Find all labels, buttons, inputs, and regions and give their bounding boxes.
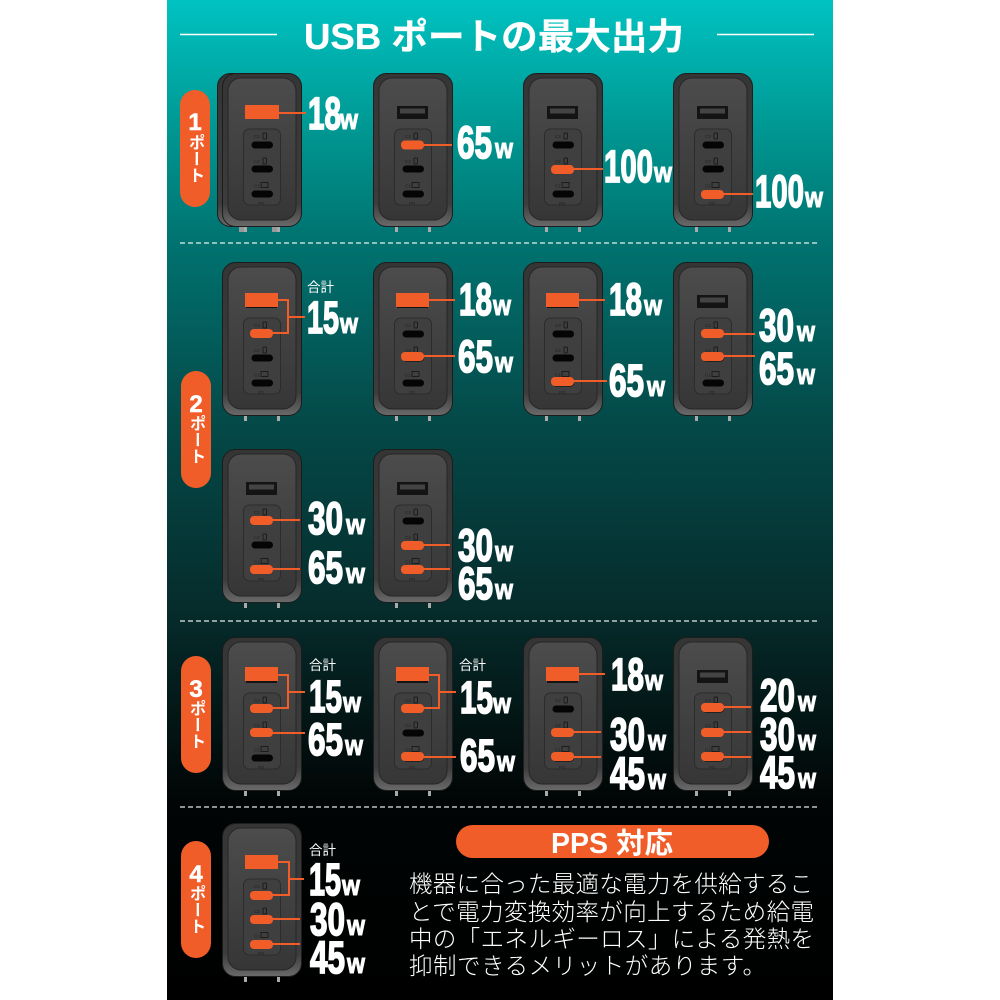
wattage total 15w 65w: 15 <box>309 671 342 722</box>
highlights and lines <box>546 293 607 386</box>
wattage 30w 65w: w <box>494 536 513 568</box>
wattage 18w 65w: 65 <box>458 331 493 382</box>
wattage 30w 65w: w <box>494 574 513 606</box>
charger: 3 ports 18w 30w 45w <box>524 638 666 799</box>
badge: 4 ports <box>181 841 211 958</box>
title: USB ポートの最大出力 <box>304 16 684 57</box>
wattage 18w: 18 <box>308 88 341 139</box>
wattage 18w 65w <box>458 274 513 382</box>
badge: 3 ports: 3 <box>189 676 203 703</box>
charger icon <box>218 74 302 232</box>
charger: 3 ports 20w 30w 45w <box>674 638 816 798</box>
text block: PPS description: 抑制できるメリットがあります。 <box>409 953 766 979</box>
wattage 18w 30w 45w: w <box>647 725 666 757</box>
wattage 20w 30w 45w <box>760 670 816 798</box>
wattage total 15w 30w 45w: 合計 <box>309 843 336 858</box>
wattage total 15w 65w: w <box>344 730 363 762</box>
wattage 30w 65w: 65 <box>458 558 493 609</box>
highlight and line <box>701 190 753 199</box>
wattage 100w: w <box>804 182 823 214</box>
wattage 30w 65w: 30 <box>308 493 343 544</box>
charger: 2 ports total 15w <box>222 262 358 421</box>
badge: 4 ports: 4 <box>189 861 203 888</box>
wattage total 15w 30w 45w: w <box>346 948 365 980</box>
wattage 18w 65w: w <box>646 371 665 403</box>
wattage 30w 65w: 65 <box>759 343 794 394</box>
charger icon <box>222 262 302 421</box>
charger icon <box>222 450 302 608</box>
highlights and bracket <box>245 293 305 338</box>
highlights and lines <box>701 329 755 361</box>
highlights and lines <box>546 667 605 761</box>
wattage 100w: 100 <box>755 166 804 217</box>
text block: PPS description: 中の「エネルギーロス」による発熱を <box>409 926 814 952</box>
wattage total 15w 65w: 65 <box>308 714 343 765</box>
charger icon <box>374 262 452 421</box>
badge: 3 ports: ポート <box>187 700 205 750</box>
wattage 20w 30w 45w: 45 <box>760 747 795 798</box>
badge: 3 ports <box>181 656 211 773</box>
wattage 18w 30w 45w: w <box>647 764 666 796</box>
charger: 1 port C2 100w <box>524 74 672 232</box>
wattage 18w 30w 45w: w <box>644 665 663 697</box>
charger: 1 port C3 65w <box>374 74 513 232</box>
wattage 18w 65w: 18 <box>609 274 642 325</box>
wattage total 15w 65w: w <box>496 746 515 778</box>
highlight and line <box>401 140 452 150</box>
wattage total 15w 65w: 65 <box>460 730 495 781</box>
wattage total 15w 30w 45w <box>309 843 365 983</box>
wattage 30w 65w: w <box>796 316 815 348</box>
wattage 18w 65w: 65 <box>609 355 644 406</box>
wattage 65w: 65 <box>457 117 492 168</box>
charger: 2 ports 30w 65w <box>674 262 815 421</box>
wattage 20w 30w 45w: w <box>797 725 816 757</box>
wattage total 15w 65w: 合計 <box>309 658 336 673</box>
wattage total 15w 30w 45w: 15 <box>309 854 341 905</box>
charger: 1 port USB-A 18w <box>218 74 358 232</box>
wattage 30w 65w <box>458 520 513 609</box>
text block: PPS description: とで電力変換効率が向上するため給電 <box>409 899 814 925</box>
charger icon <box>374 450 452 608</box>
wattage 30w 65w: w <box>345 558 365 590</box>
wattage 30w 65w: w <box>796 359 815 391</box>
charger icon <box>374 74 452 232</box>
wattage 20w 30w 45w: w <box>797 686 816 718</box>
wattage 30w 65w <box>759 300 815 394</box>
wattage 30w 65w: 30 <box>759 300 794 351</box>
heading pill: PPS: PPS 対応 <box>551 828 673 860</box>
wattage total 15w: w <box>339 308 358 340</box>
wattage 18w 65w: w <box>643 290 662 322</box>
wattage total 15w 30w 45w: 45 <box>310 932 345 983</box>
wattage 65w: w <box>494 133 513 165</box>
charger icon <box>674 74 752 232</box>
wattage total 15w 30w 45w: w <box>346 910 365 942</box>
charger icon <box>374 638 452 796</box>
wattage total 15w: 15 <box>307 292 339 343</box>
wattage total 15w 65w <box>308 658 363 765</box>
wattage total 15w 65w: w <box>492 688 511 720</box>
charger: 4 ports total 15w 30w 45w <box>222 824 365 983</box>
charger: 2 ports 30w 65w C3 C1 <box>222 450 365 608</box>
wattage total 15w 65w: 15 <box>460 672 493 723</box>
wattage 18w 65w: w <box>494 347 513 379</box>
badge: 1 port: ポート <box>186 134 204 184</box>
wattage total 15w 65w: 合計 <box>459 658 486 673</box>
charger icon <box>674 262 752 421</box>
wattage 30w 65w: w <box>345 509 365 541</box>
wattage 18w 65w: 18 <box>459 274 492 325</box>
charger: 2 ports 18w 65w C1 <box>524 262 665 421</box>
charger icon <box>524 74 602 232</box>
badge: 2 ports: 2 <box>189 391 203 418</box>
highlight and line <box>551 165 603 174</box>
badge: 2 ports: ポート <box>187 415 205 464</box>
highlights and lines <box>701 703 751 761</box>
wattage total 15w 30w 45w: 30 <box>310 894 345 945</box>
wattage total 15w 30w 45w: w <box>341 870 360 902</box>
charger icon <box>674 638 752 796</box>
wattage 20w 30w 45w: 30 <box>760 709 795 760</box>
badge: 2 ports <box>181 371 211 488</box>
charger icon <box>222 638 302 796</box>
charger: 1 port C1 100w <box>674 74 823 232</box>
wattage 30w 65w: 30 <box>458 520 493 571</box>
wattage 18w: w <box>339 104 358 136</box>
charger icon <box>222 824 302 982</box>
wattage 100w: 100 <box>604 141 653 192</box>
highlights and lines <box>245 855 304 949</box>
wattage total 15w 65w <box>459 658 515 781</box>
highlights and lines <box>396 667 456 761</box>
text block: PPS description <box>409 871 814 979</box>
badge: 1 port <box>180 90 210 207</box>
text block: PPS description: 機器に合った最適な電力を供給するこ <box>409 871 813 897</box>
wattage total 15w 65w: w <box>342 687 361 719</box>
highlight and line <box>245 105 306 119</box>
highlights and lines <box>401 541 450 574</box>
badge: 1 port: 1 <box>188 109 202 136</box>
wattage 18w 30w 45w: 18 <box>611 649 644 700</box>
wattage 20w 30w 45w: 20 <box>760 670 795 721</box>
charger: 3 ports total 15w 65w <box>222 638 363 796</box>
highlights and lines <box>250 516 300 574</box>
highlights and lines <box>245 667 305 737</box>
heading pill: PPS <box>456 825 769 860</box>
wattage 18w 30w 45w <box>610 649 666 799</box>
charger icon <box>524 262 602 421</box>
wattage 30w 65w <box>308 493 365 593</box>
wattage 18w 30w 45w: 45 <box>610 748 645 799</box>
charger: 2 ports 30w 65w C2 C1 <box>374 450 513 609</box>
wattage total 15w: 合計 <box>307 280 334 295</box>
wattage 100w: w <box>653 157 672 189</box>
wattage 20w 30w 45w: w <box>797 763 816 795</box>
charger: 3 ports total 15w 65w C1 <box>374 638 515 796</box>
charger: 2 ports 18w 65w <box>374 262 513 421</box>
wattage 18w 65w: w <box>492 290 511 322</box>
badge: 4 ports: ポート <box>187 885 205 934</box>
wattage 18w 65w <box>609 274 665 406</box>
wattage 18w 30w 45w: 30 <box>610 709 645 760</box>
highlights and lines <box>396 293 455 361</box>
background panel <box>167 0 833 1000</box>
charger icon <box>524 638 602 796</box>
wattage 30w 65w: 65 <box>308 542 343 593</box>
